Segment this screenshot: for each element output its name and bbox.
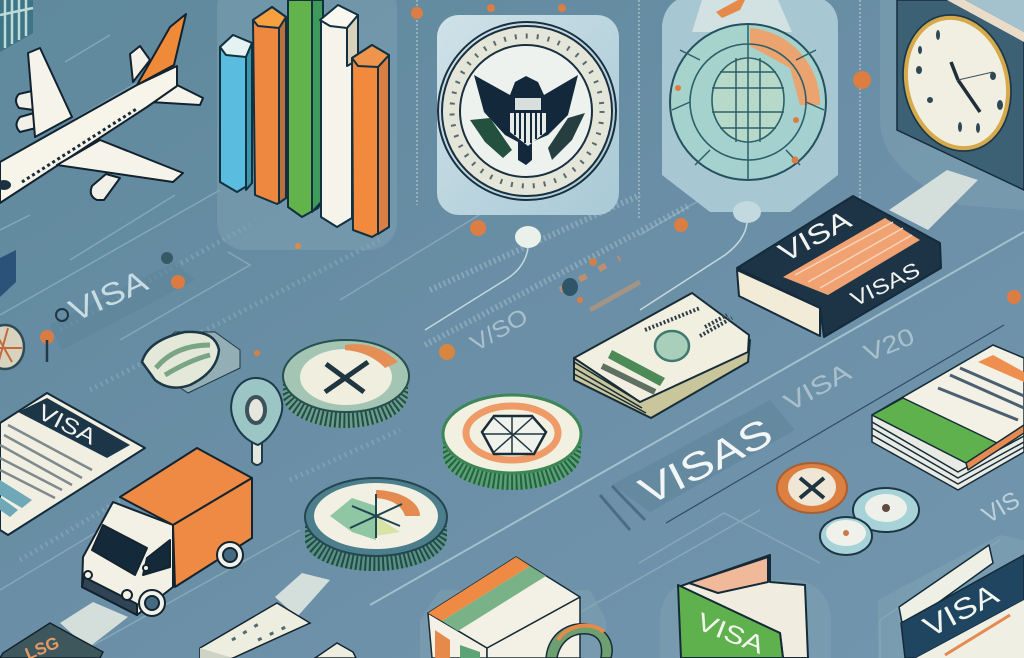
coin 2 [443, 395, 581, 490]
VISA document left: VISA [34, 399, 101, 450]
bottom card [200, 603, 356, 658]
orange dots and map pins [254, 4, 1021, 360]
VISA book dark: VISA [773, 204, 856, 268]
open green visa book: VISA [693, 608, 768, 658]
VISA book dark [737, 196, 941, 337]
dark visa passport bottom right: VISA [918, 578, 1005, 644]
official seal panel [437, 15, 619, 215]
small coins [777, 463, 919, 555]
blue bar [220, 35, 252, 192]
cream road strips [60, 170, 978, 648]
icon: eagle [470, 75, 585, 165]
passport card stack [574, 293, 750, 418]
VISA book dark: VISAS [847, 258, 924, 311]
orange wedge [750, 28, 820, 105]
VISA document left [0, 393, 145, 535]
location pin [231, 378, 282, 465]
green bar [288, 0, 323, 217]
coin 3 [305, 478, 447, 571]
bar chart [220, 0, 389, 237]
green document stack [872, 345, 1024, 490]
document icon top left [0, 0, 33, 52]
left edge badges [0, 250, 24, 369]
VISAS banner label: VISAS [633, 411, 779, 514]
orange bar right [352, 45, 389, 237]
faint VISA labels [466, 303, 1024, 529]
pale coin [820, 517, 872, 555]
coin 1 [283, 340, 409, 428]
bottom left dark card [0, 623, 103, 658]
orange coin [777, 463, 847, 513]
faint VISA card label: VISA [64, 263, 153, 328]
open green visa book [678, 555, 808, 658]
light panels behind objects [217, 0, 1024, 658]
blue coin [853, 488, 919, 532]
faint VISA labels: VIS [978, 486, 1024, 529]
faint VISA labels: VISA [779, 358, 856, 417]
white bar [320, 5, 358, 227]
globe panel [662, 0, 838, 212]
faint VISA labels: V20 [860, 323, 918, 368]
orange bar [253, 7, 286, 204]
striped box [428, 557, 612, 658]
clock panel [889, 0, 1024, 190]
engines [16, 91, 120, 200]
dark visa passport bottom right [899, 545, 1024, 658]
small lens badge [142, 332, 240, 393]
VISAS banner label [600, 400, 795, 530]
airplane icon [0, 14, 203, 203]
faint VISA card label [40, 252, 195, 362]
delivery truck [82, 448, 252, 616]
faint VISA labels: V/SO [466, 303, 532, 356]
